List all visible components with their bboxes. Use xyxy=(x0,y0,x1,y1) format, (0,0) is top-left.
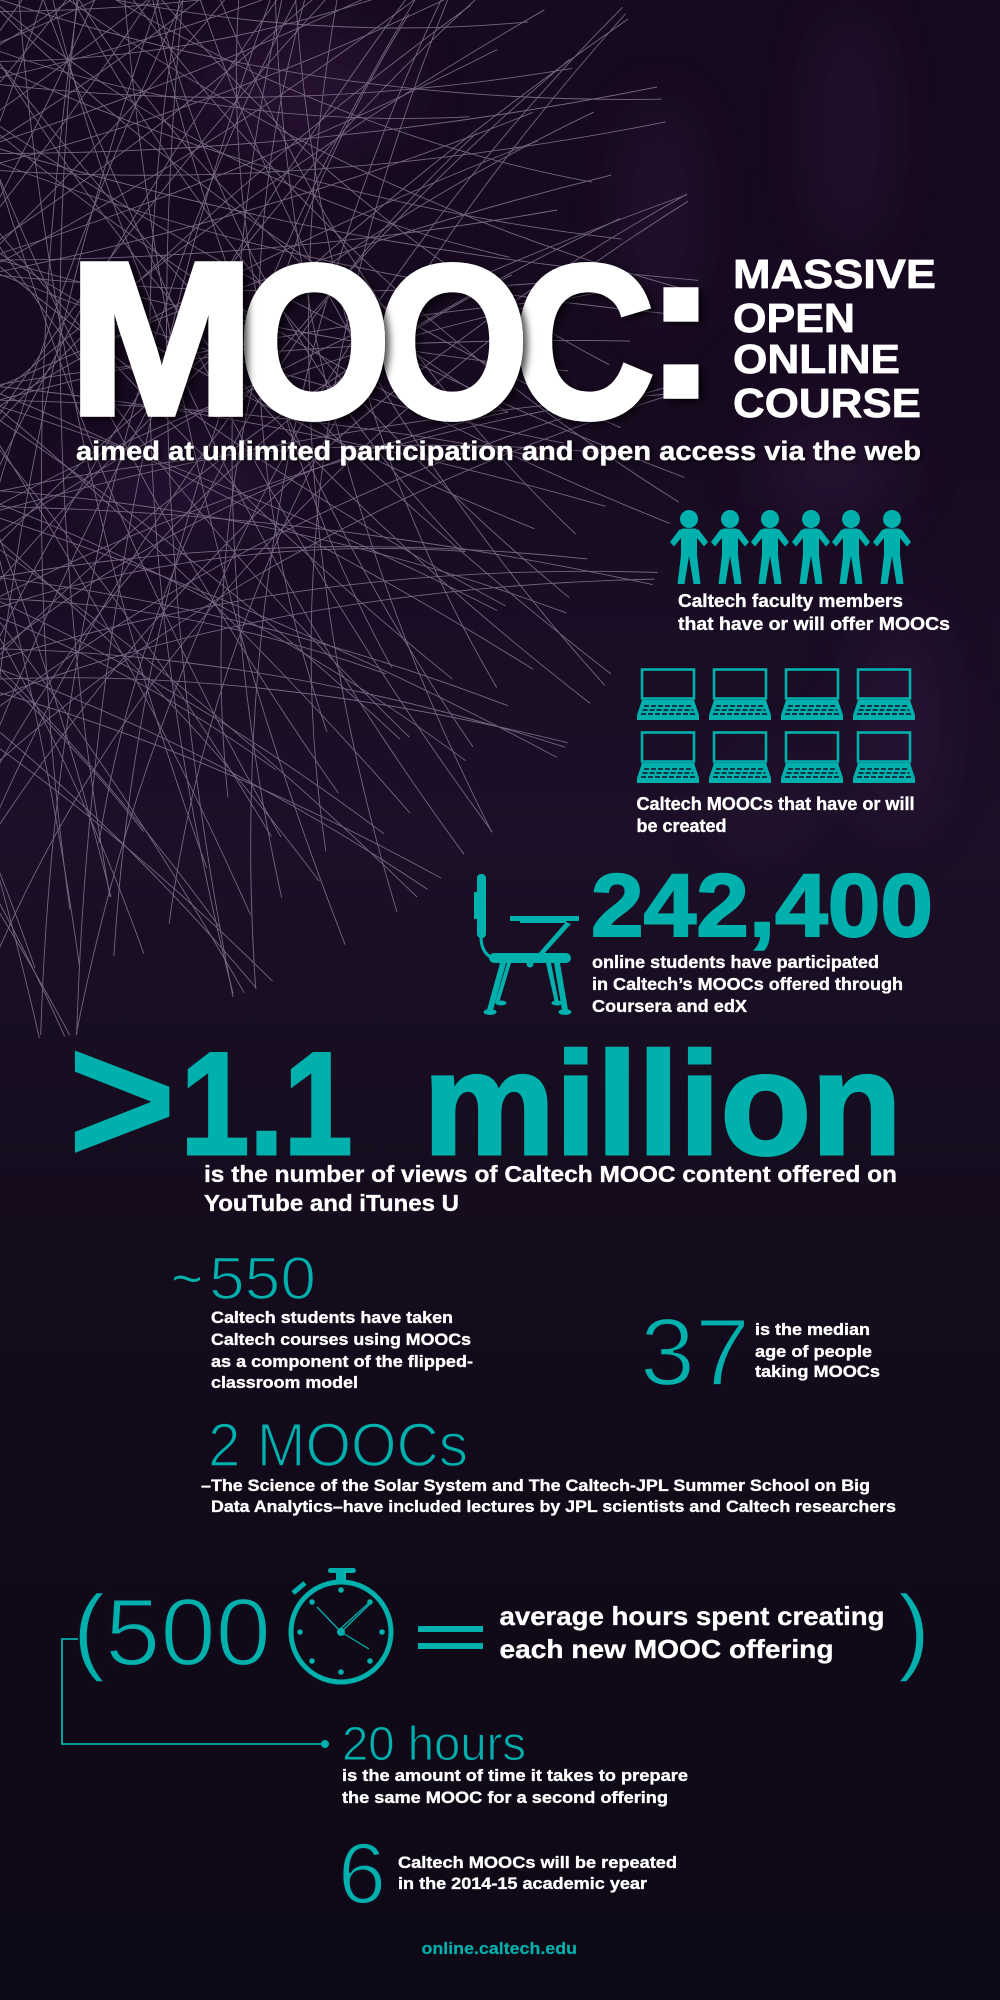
statistic: 500: 500 xyxy=(105,1579,271,1686)
text: repeated MOOCs: Caltech MOOCs will be repeated xyxy=(398,1853,677,1872)
text: MOOCs created: be created xyxy=(636,816,726,836)
text: repeated MOOCs xyxy=(398,1853,677,1893)
text: online students xyxy=(592,952,903,1016)
statistic: 20 hours: 20 hours xyxy=(342,1718,526,1771)
statistic: greater than 1.1 million: million xyxy=(423,1022,902,1185)
icon: stopwatch xyxy=(291,1568,391,1682)
text: median age: age of people xyxy=(755,1342,872,1361)
statistic: greater than 1.1 million xyxy=(67,994,902,1206)
text: views xyxy=(204,1161,897,1216)
footer link text: online.caltech.edu xyxy=(422,1939,577,1958)
statistic: about 550: 550 xyxy=(209,1245,316,1312)
title: MOOC: : xyxy=(646,206,716,441)
text: students flipped classroom: Caltech students have taken xyxy=(211,1308,453,1327)
text: views: YouTube and iTunes U xyxy=(204,1190,459,1216)
text: faculty members: Caltech faculty members xyxy=(678,590,903,611)
statistic: 242,400: 242,400 xyxy=(591,855,933,955)
text: median age xyxy=(755,1320,880,1381)
title: MOOC xyxy=(68,206,716,463)
text: median age: taking MOOCs xyxy=(755,1362,880,1381)
title: MOOC: M xyxy=(68,217,255,460)
equals sign xyxy=(418,1626,483,1649)
heading: massive open online course: ONLINE xyxy=(733,336,900,382)
text: students flipped classroom: as a component of the flipped- xyxy=(211,1352,473,1371)
statistic: 6: 6 xyxy=(338,1826,386,1922)
icon: school desk chair xyxy=(474,874,579,1015)
heading: massive open online course: OPEN xyxy=(733,295,855,341)
text: second offering xyxy=(342,1766,688,1807)
text: second offering: is the amount of time it takes to prepare xyxy=(342,1766,688,1785)
statistic: greater than 1.1 million: > xyxy=(67,994,177,1206)
connector from 500 hours to 20 hours xyxy=(62,1639,329,1748)
title: MOOC: O xyxy=(376,219,529,463)
text: JPL lectures xyxy=(201,1476,896,1516)
heading: massive open online course xyxy=(733,251,936,426)
text: online students: Coursera and edX xyxy=(592,996,747,1016)
text: MOOCs created xyxy=(636,794,914,836)
icon: eight laptops xyxy=(637,670,915,783)
text: online students: online students have participated xyxy=(592,952,879,972)
text: repeated MOOCs: in the 2014-15 academic year xyxy=(398,1874,647,1893)
statistic: 37: 37 xyxy=(640,1299,750,1406)
text: MOOCs created: Caltech MOOCs that have or will xyxy=(636,794,914,814)
statistic: greater than 1.1 million: 1.1 xyxy=(180,1022,352,1185)
text: average hours xyxy=(500,1601,884,1664)
statistic: about 550: ~ xyxy=(171,1245,203,1312)
icon: six faculty figures xyxy=(670,510,911,584)
statistic: 2 MOOCs: 2 MOOCs xyxy=(208,1411,468,1479)
text: second offering: the same MOOC for a second offering xyxy=(342,1788,668,1807)
text: views: is the number of views of Caltech MOOC content offered on xyxy=(204,1161,897,1187)
text: faculty members xyxy=(678,590,950,634)
opening parenthesis: ( xyxy=(73,1576,105,1683)
decorative line starburst xyxy=(0,0,788,1130)
title: MOOC: O xyxy=(238,219,391,463)
text: students flipped classroom: classroom model xyxy=(211,1373,358,1392)
text: average hours: average hours spent creating xyxy=(500,1601,884,1631)
title: MOOC: C xyxy=(513,219,655,463)
statistic: about 550 xyxy=(171,1245,316,1312)
text: online students: in Caltech’s MOOCs offered through xyxy=(592,974,903,994)
text: faculty members: that have or will offer MOOCs xyxy=(678,613,950,634)
text: JPL lectures: –The Science of the Solar System and The Caltech-JPL Summer School on Big xyxy=(201,1476,870,1495)
text: students flipped classroom xyxy=(211,1308,473,1392)
heading: massive open online course: MASSIVE xyxy=(733,251,936,297)
heading: massive open online course: COURSE xyxy=(733,380,921,426)
closing parenthesis: ) xyxy=(898,1576,930,1683)
text: median age: is the median xyxy=(755,1320,870,1339)
tagline: aimed at unlimited participation and open access via the web xyxy=(76,436,921,466)
text: JPL lectures: Data Analytics–have included lectures by JPL scientists and Caltech researchers xyxy=(211,1497,896,1516)
text: students flipped classroom: Caltech courses using MOOCs xyxy=(211,1330,471,1349)
text: average hours: each new MOOC offering xyxy=(500,1634,834,1664)
